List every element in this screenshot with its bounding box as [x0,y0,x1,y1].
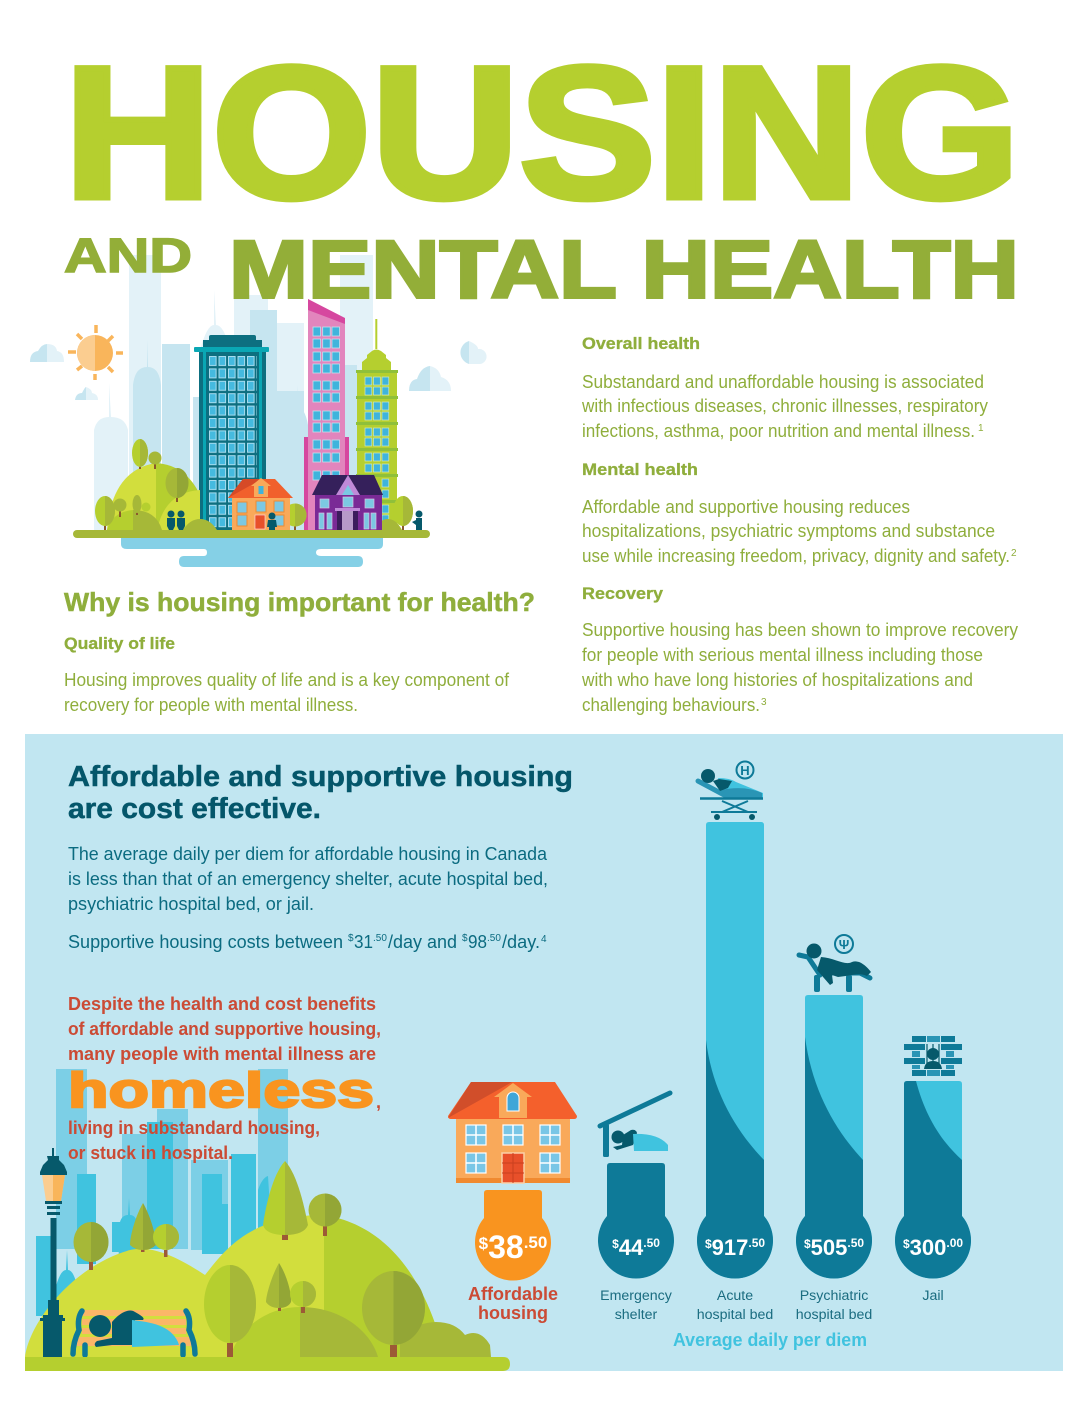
text block: mental health [582,460,1017,566]
title: MENTAL HEALTH: MENTAL HEALTH [229,224,1019,316]
text block: per diem explanation: Supportive housing costs between [68,932,343,952]
text block: overall health: infections, asthma, poor nutrition and mental illness. [582,421,975,441]
text block: recovery: 3 [761,697,767,708]
text block: recovery: Supportive housing has been shown to improve recovery [582,620,1018,640]
text block: mental health: Affordable and supportive housing reduces [582,497,910,517]
text block: per diem explanation: psychiatric hospital bed, or jail. [68,894,314,914]
bar: acute hospital bed [697,822,773,1279]
heading: why is housing important: Why is housing important for health? [64,587,535,617]
callout: homelessness [68,994,381,1163]
label: acute hospital bed: Acute [717,1288,753,1304]
text block: mental health: hospitalizations, psychiatric symptoms and substance [582,521,995,541]
label: emergency shelter: Emergency [600,1288,673,1304]
ground [73,530,430,538]
text block: mental health: 2 [1011,548,1017,559]
text block: quality of life: Housing improves quality of life and is a key component of [64,670,510,690]
bar: acute hospital bed: 917 [712,1235,748,1260]
label: emergency shelter [600,1288,673,1323]
label: jail: Jail [922,1288,944,1304]
callout: homelessness: homeless [68,1064,374,1118]
illustration: city skyline [30,255,487,567]
text block: overall health: with infectious diseases, chronic illnesses, respiratory [581,396,988,416]
text block: recovery [581,584,1018,715]
text block: recovery: challenging behaviours. [582,695,760,715]
text block: quality of life [64,634,510,715]
pink tower [304,299,349,530]
purple house [312,475,383,530]
label: psychiatric hospital bed [796,1288,872,1323]
text block: recovery: for people with serious mental illness including those [582,645,983,665]
icon: person sleeping on bench [73,1310,195,1355]
hills [25,1215,491,1357]
callout: homelessness: or stuck in hospital. [68,1143,233,1163]
text block: cost effective heading: are cost effective. [68,793,321,825]
hills and trees [95,439,413,530]
trees [74,1161,425,1357]
icon: psychiatric couch: Ψ [839,937,849,952]
bar: psychiatric hospital bed: 505 [811,1235,847,1260]
background towers [94,255,373,530]
icon: psychiatric couch [799,935,871,992]
water [121,538,383,567]
text block: per diem explanation: /day. [502,932,540,952]
bar: emergency shelter [598,1163,674,1279]
text block: per diem explanation: 98 [468,932,487,952]
bar: jail [895,1081,971,1279]
bar: acute hospital bed: .50 [748,1236,765,1250]
text block: cost effective heading: Affordable and supportive housing [68,761,573,793]
bar: acute hospital bed: $ [705,1237,712,1251]
icon: sun [68,325,123,380]
teal tower [194,335,269,530]
bar: emergency shelter: .50 [643,1236,660,1250]
bar: psychiatric hospital bed: $ [804,1237,811,1251]
bar: psychiatric hospital bed [796,995,872,1279]
bar: emergency shelter: $ [612,1237,619,1251]
callout: homelessness: of affordable and supportive housing, [68,1019,381,1039]
text block: mental health: use while increasing freedom, privacy, dignity and safety. [582,546,1010,566]
callout: homelessness: living in substandard housing, [68,1118,320,1138]
callout: homelessness: , [376,1092,381,1112]
ground [25,1357,510,1371]
text block: overall health: Substandard and unaffordable housing is associated [582,372,984,392]
text block: overall health [581,334,988,441]
text block: quality of life: recovery for people with mental illness. [64,695,358,715]
bar: affordable housing: 38 [488,1229,524,1265]
icon: hospital bed: H [740,763,750,778]
skyline [36,1069,288,1320]
text block: overall health: Overall health [582,334,700,353]
bar: psychiatric hospital bed: .50 [847,1236,864,1250]
text block: mental health: Mental health [582,460,698,479]
icon: affordable house [448,1082,577,1183]
label: affordable housing: Affordable [468,1284,558,1304]
label: psychiatric hospital bed: Psychiatric [800,1288,868,1304]
chart caption: Average daily per diem [673,1330,867,1350]
title: AND: AND [64,230,192,283]
text block: per diem explanation: $ [462,933,468,944]
bar: affordable housing: $ [479,1234,489,1253]
text block: recovery: Recovery [582,584,664,603]
callout: homelessness: many people with mental illness are [68,1044,376,1064]
text block: overall health: 1 [978,423,984,434]
text block: cost effective heading [68,761,573,825]
label: psychiatric hospital bed: hospital bed [796,1307,872,1323]
icon: street lamp [40,1148,67,1357]
text block: per diem explanation: The average daily per diem for affordable housing in Canada [68,844,548,864]
people silhouettes [167,510,422,530]
text block: per diem explanation: .50 [487,933,501,944]
icon: clouds [30,341,487,400]
panel: cost effectiveness [25,734,1063,1371]
text block: quality of life: Quality of life [64,634,175,653]
bar: jail: .00 [946,1236,963,1250]
bar: emergency shelter: 44 [619,1235,644,1260]
bar: jail: 300 [910,1235,946,1260]
text block: per diem explanation [68,844,548,952]
label: acute hospital bed: hospital bed [697,1307,773,1323]
icon: jail [904,1036,962,1076]
label: affordable housing: housing [478,1303,548,1323]
label: acute hospital bed [697,1288,773,1323]
title: HOUSING: HOUSING [64,28,1020,238]
text block: per diem explanation: is less than that of an emergency shelter, acute hospital bed, [68,869,548,889]
text block: per diem explanation: .50 [373,933,387,944]
bar: affordable housing [475,1190,551,1281]
illustration: park with skyline [25,1069,510,1371]
label: affordable housing [468,1284,558,1323]
label: emergency shelter: shelter [615,1307,658,1323]
text block: recovery: with who have long histories of hospitalizations and [581,670,973,690]
text block: per diem explanation: 31 [354,932,373,952]
green tower [356,319,398,530]
text block: per diem explanation: $ [348,933,354,944]
text block: per diem explanation: 4 [541,934,547,945]
icon: emergency shelter [600,1093,670,1157]
icon: hospital bed [698,762,763,820]
text block: per diem explanation: /day and [388,932,457,952]
bar: affordable housing: .50 [524,1233,547,1252]
callout: homelessness: Despite the health and cost benefits [68,994,376,1014]
orange house [228,478,293,530]
bar: jail: $ [903,1237,910,1251]
